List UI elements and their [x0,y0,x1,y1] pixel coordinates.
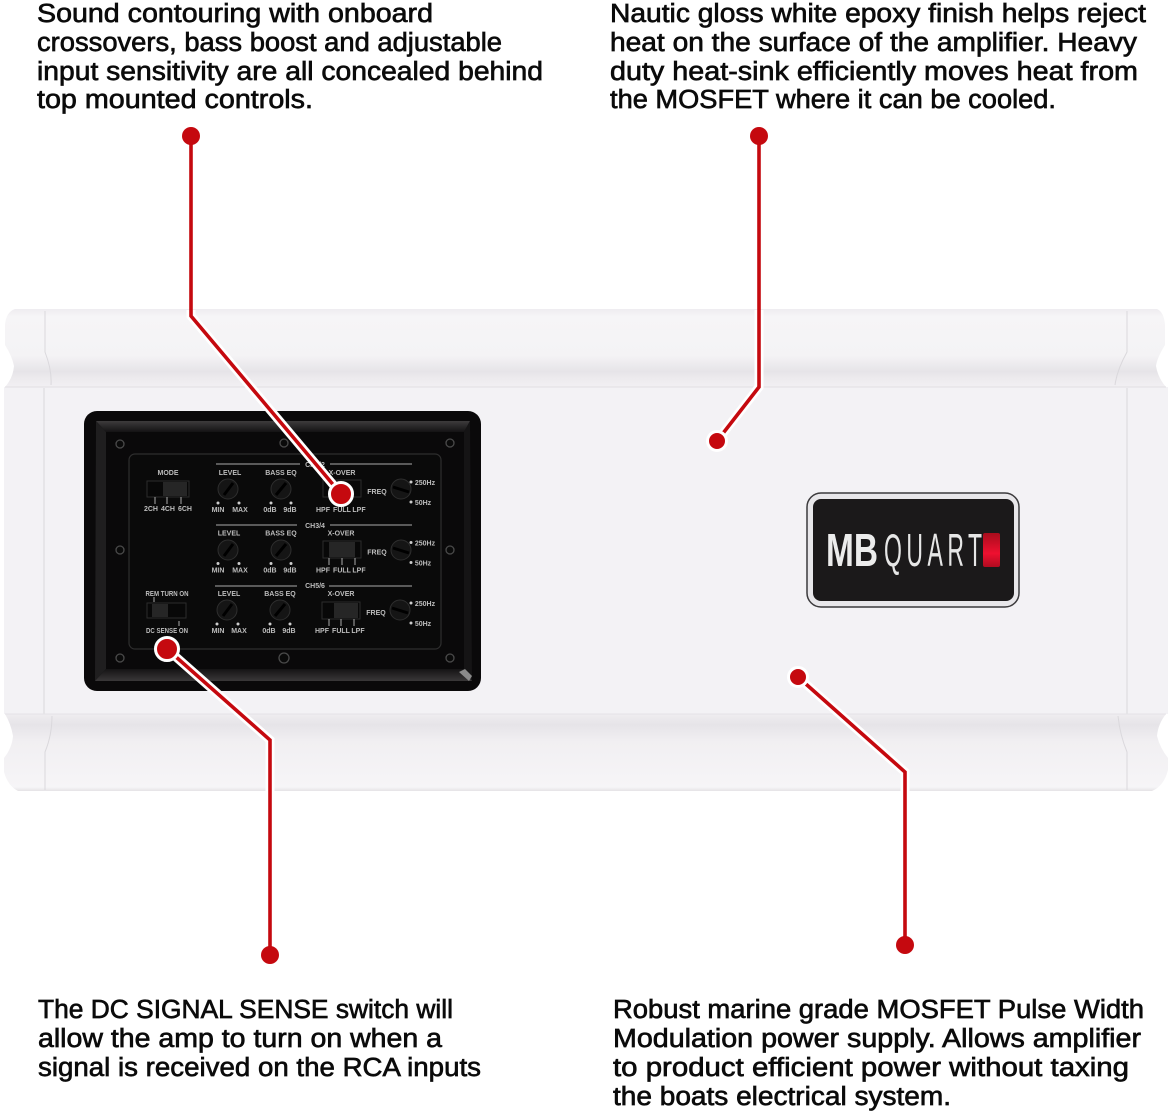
callout line: power supply [798,677,905,945]
panel screws [116,439,454,663]
text block: sound contouring: input sensitivity are all concealed behind [37,58,543,86]
row: channel 5/6 controls: 9dB [282,628,296,635]
badge black plate [813,499,1014,601]
text block: sound contouring: Sound contouring with onboard [37,0,433,28]
row: channel 1/2 controls: 250Hz [415,480,436,487]
amplifier seams [5,311,1166,790]
row: channel 5/6 controls: CH5/6 [305,583,325,590]
mode switch: 2CH [144,506,158,513]
control panel [84,411,481,691]
row: channel 3/4 controls: LPF [352,568,366,574]
sense switch [146,591,188,635]
row: channel 3/4 controls: MAX [232,568,248,574]
mode switch [144,470,192,513]
row: channel 5/6 controls: 50Hz [415,621,432,628]
row: channel 5/6 controls: BASS EQ [264,591,296,598]
text block: power supply [613,996,1144,1111]
mode switch: 4CH [161,506,175,513]
row: channel 5/6 controls: FREQ [366,610,386,617]
logo badge [807,493,1019,607]
row: channel 3/4 controls [212,523,436,574]
panel bezel [84,411,481,691]
row: channel 5/6 controls: 0dB [262,628,276,635]
text block: power supply: to product efficient power without taxing [613,1054,1129,1082]
row: channel 5/6 controls: LEVEL [218,591,241,598]
row: channel 1/2 controls: 50Hz [415,500,432,507]
mode switch: 6CH [178,506,192,513]
row: channel 3/4 controls: LEVEL [218,530,241,538]
callout dot: controls top [182,127,200,145]
row: channel 3/4 controls: 9dB [283,568,297,574]
amplifier bottom rail [4,714,1168,791]
row: channel 3/4 controls: X-OVER [328,530,354,538]
row: channel 3/4 controls: FULL [333,568,352,574]
row: channel 1/2 controls: HPF [316,507,331,514]
callout line: signal sense [167,649,270,955]
row: channel 5/6 controls: X-OVER [328,591,354,598]
row: channel 1/2 controls: FULL [333,507,352,514]
badge frame [807,493,1019,607]
row: channel 3/4 controls: 50Hz [415,560,432,568]
callout dot: signal sense bottom [261,946,279,964]
logo text QUART: QUART [884,524,987,576]
text block: nautic finish: duty heat-sink efficiently moves heat from [610,58,1138,86]
row: channel 5/6 controls: FULL [332,628,351,635]
row: channel 3/4 controls: MIN [212,568,224,574]
text block: nautic finish: Nautic gloss white epoxy finish helps reject [610,0,1146,28]
row: channel 3/4 controls: CH3/4 [305,523,325,530]
row: channel 5/6 controls: MAX [231,628,247,635]
row: channel 1/2 controls: FREQ [367,489,387,496]
panel face [129,454,441,649]
row: channel 3/4 controls: HPF [316,568,331,574]
text block: nautic finish: the MOSFET where it can be cooled. [610,86,1056,114]
sense switch: DC SENSE ON [146,628,188,635]
text block: signal sense: signal is received on the RCA inputs [38,1054,481,1082]
text block: power supply: Modulation power supply. Allows amplifier [613,1025,1142,1053]
row: channel 3/4 controls: FREQ [367,550,387,556]
text block: sound contouring: top mounted controls. [37,86,313,114]
callout dot: signal sense target [156,638,178,660]
row: channel 1/2 controls: BASS EQ [265,470,297,477]
row: channel 1/2 controls: 9dB [283,507,297,514]
callout line: top mounted controls [191,136,341,494]
row: channel 3/4 controls: BASS EQ [265,530,297,538]
callout line: heat sink [717,136,759,441]
row: channel 3/4 controls: 0dB [263,568,277,574]
row: channel 1/2 controls: MAX [232,507,248,514]
row: channel 1/2 controls: CH1/2 [305,462,325,469]
row: channel 5/6 controls: MIN [212,628,224,635]
row: channel 1/2 controls: LPF [352,507,366,514]
text block: power supply: the boats electrical system. [613,1083,951,1111]
callout dot: heat sink target [708,432,726,450]
text block: nautic finish [610,0,1146,114]
callout dot: power supply target [788,668,808,686]
logo red block [983,533,1000,567]
row: channel 1/2 controls: X-OVER [329,470,355,477]
logo text MB: MB [826,524,878,576]
amplifier top rail [5,309,1166,387]
row: channel 3/4 controls: 250Hz [415,540,436,548]
row: channel 1/2 controls [212,462,436,514]
mode switch: MODE [158,470,179,477]
row: channel 1/2 controls: MIN [212,507,224,514]
text block: sound contouring: crossovers, bass boost and adjustable [37,29,502,57]
callout dot: controls target [330,482,352,506]
amplifier body [4,309,1168,791]
row: channel 5/6 controls: LPF [351,628,365,635]
text block: sound contouring [37,0,543,114]
callout dot: power supply bottom [896,936,914,954]
row: channel 5/6 controls: 250Hz [415,601,436,608]
row: channel 1/2 controls: 0dB [263,507,277,514]
panel bevels [95,421,472,681]
row: channel 1/2 controls: LEVEL [219,470,242,477]
text block: nautic finish: heat on the surface of the amplifier. Heavy [610,29,1137,57]
text block: power supply: Robust marine grade MOSFET Pulse Width [613,996,1144,1024]
text block: signal sense [38,996,481,1082]
text block: signal sense: allow the amp to turn on when a [38,1025,443,1053]
callout dot: heat sink top [750,127,768,145]
amplifier centre panel [4,387,1168,714]
sense switch: REM TURN ON [146,591,188,598]
row: channel 5/6 controls [212,583,436,635]
row: channel 5/6 controls: HPF [315,628,330,635]
text block: signal sense: The DC SIGNAL SENSE switch will [38,996,453,1024]
